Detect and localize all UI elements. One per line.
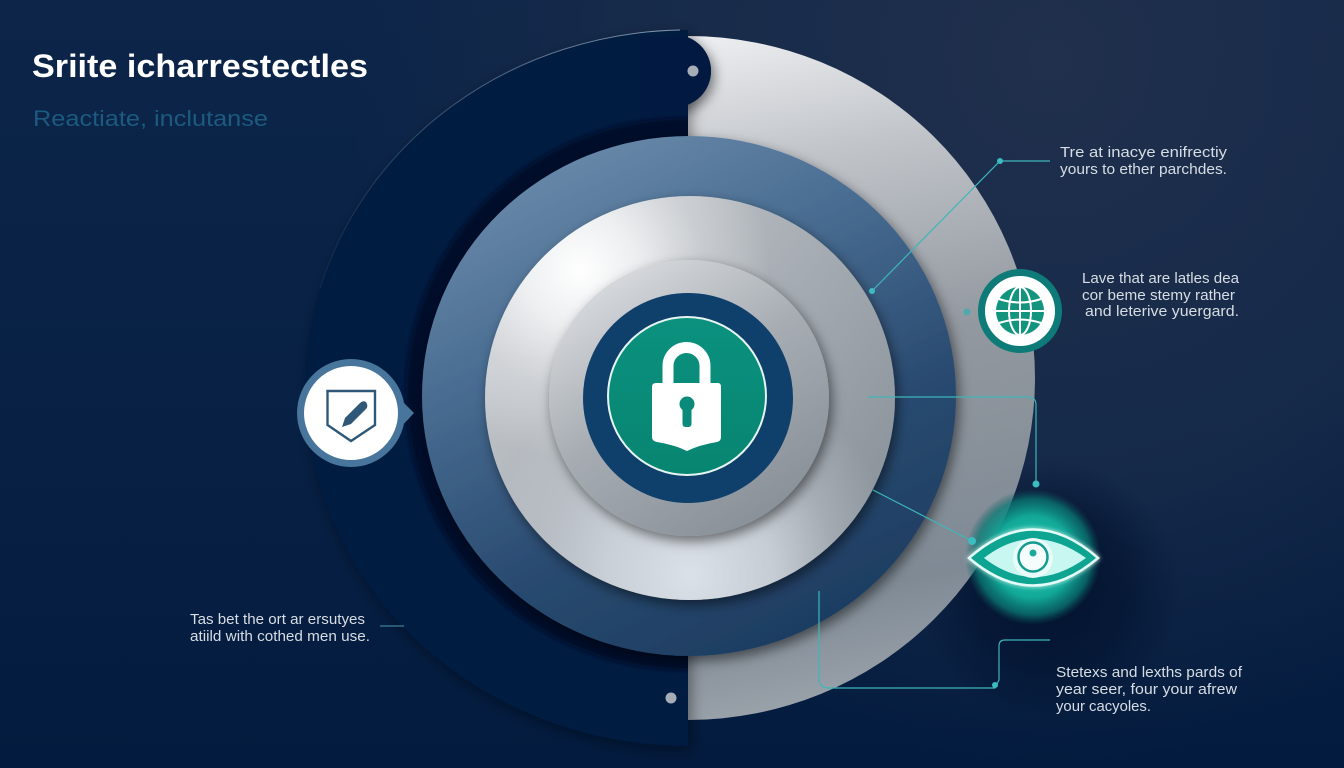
panel: navy top tab shadow [639, 35, 711, 107]
panel: inner silver ring [549, 260, 829, 536]
text block: bottom right: year seer, four your afrew [1056, 682, 1238, 698]
text block: bottom left: Tas bet the ort ar ersutyes [190, 612, 365, 628]
bottom rivet [666, 692, 676, 704]
icon: globe badge [982, 272, 1058, 350]
text block: bottom left [190, 612, 370, 645]
panel: silver ring [485, 196, 895, 600]
connector lines [380, 161, 1050, 688]
title: Sriite icharrestectles [32, 48, 368, 84]
text block: bottom right: Stetexs and lexths pards of [1056, 665, 1243, 681]
dark inner shadow ring [405, 117, 688, 671]
panel: silver right half ring [688, 36, 1035, 720]
text block: middle right: Lave that are latles dea [1082, 271, 1240, 287]
panel: blue ring [422, 136, 956, 656]
text block: middle right: cor beme stemy rather [1082, 288, 1235, 304]
icon: padlock [652, 348, 721, 451]
icon: glowing eye [965, 489, 1101, 625]
text block: bottom left: atiild with cothed men use. [190, 629, 370, 645]
text block: top right: yours to ether parchdes. [1060, 162, 1227, 178]
panel: green core [608, 317, 766, 475]
text block: bottom right: your cacyoles. [1056, 699, 1151, 715]
navy ring highlight edge [320, 30, 680, 289]
panel: navy core ring [583, 293, 793, 503]
panel: navy top tab with rivet [639, 35, 711, 126]
text block: bottom right [1056, 665, 1243, 715]
text block: middle right [1082, 271, 1240, 320]
panel: navy left half ring [305, 30, 688, 746]
icon: shield pencil badge [300, 362, 414, 464]
globe connector dot [964, 308, 970, 316]
subtitle: Reactiate, inclutanse [33, 106, 268, 131]
text block: top right [1060, 145, 1228, 178]
text block: top right: Tre at inacye enifrectiy [1060, 145, 1228, 161]
connector dots [869, 158, 1040, 688]
text block: middle right: and leterive yuergard. [1085, 304, 1239, 320]
